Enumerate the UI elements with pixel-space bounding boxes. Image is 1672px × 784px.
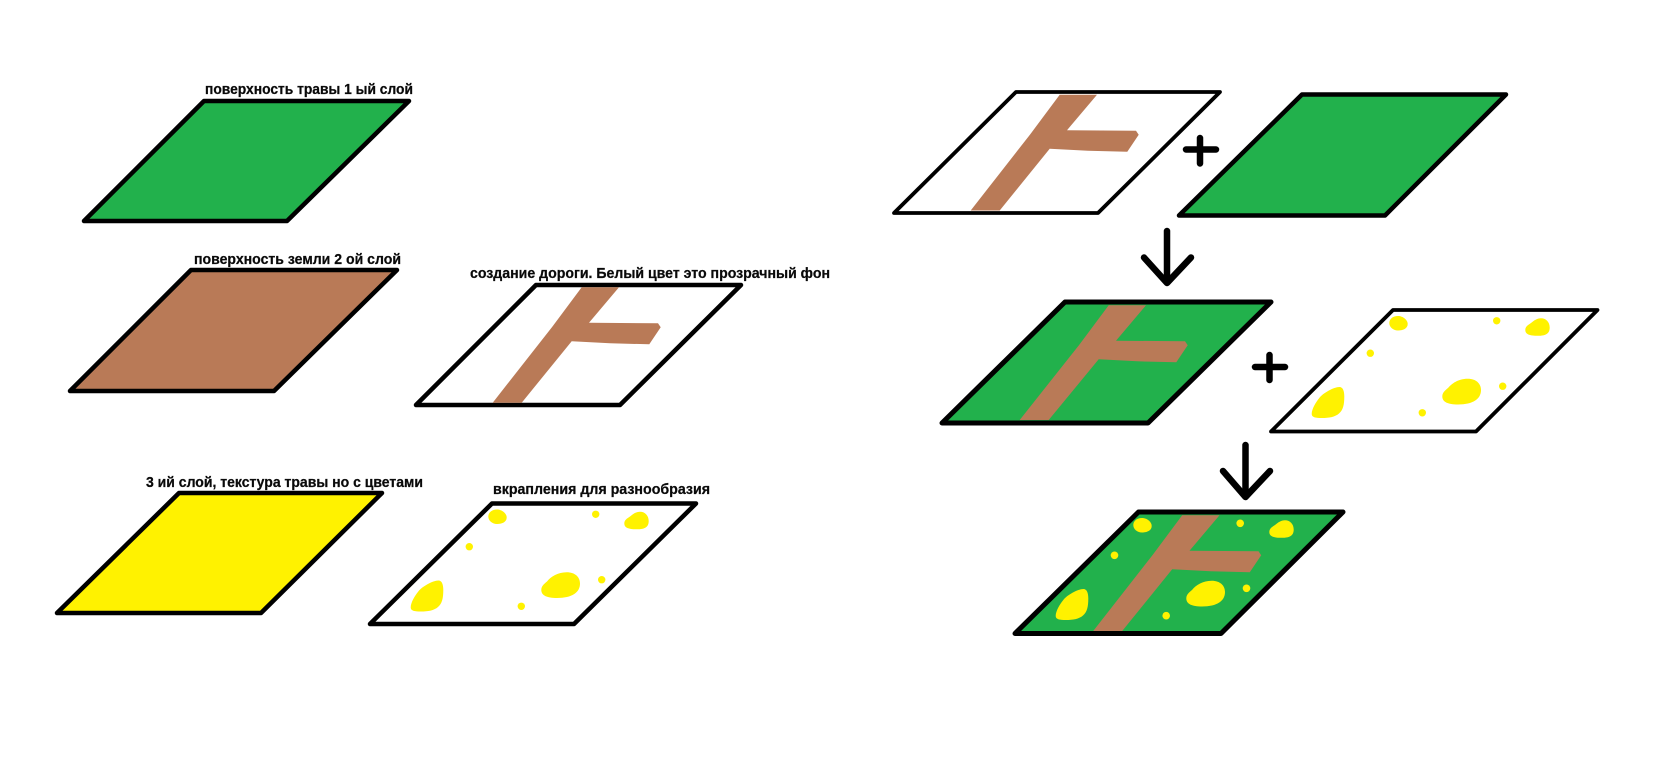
tile: green step 1 — [1179, 94, 1506, 216]
panel: yellow layer 3 — [57, 475, 423, 613]
tile: grass with road composite — [942, 302, 1271, 423]
tile: yellow — [57, 493, 382, 613]
heading: earth layer: поверхность земли 2 ой слой — [194, 252, 401, 268]
icon: plus 2 — [1255, 355, 1285, 380]
heading: road creation: создание дороги. Белый цвет это прозрачный фон — [470, 266, 830, 282]
tile: green — [84, 101, 409, 221]
tile: brown — [70, 270, 397, 391]
panel: earth layer 2 — [70, 252, 401, 391]
icon: plus 1 — [1186, 138, 1216, 164]
panel: grass layer 1 — [84, 82, 413, 221]
tile: road step 1 — [894, 92, 1220, 213]
tile: road on transparent — [416, 285, 741, 405]
heading: yellow layer: 3 ий слой, текстура травы но с цветами — [146, 475, 423, 491]
tile: final composite — [1015, 512, 1343, 634]
panel: road creation — [416, 266, 830, 405]
arrow: down 1 — [1144, 231, 1191, 283]
panel: flower specks — [370, 482, 710, 624]
tile: specks on transparent — [370, 504, 696, 624]
arrow: down 2 — [1223, 445, 1270, 497]
heading: specks: вкрапления для разнообразия — [493, 482, 710, 498]
tile: specks step 2 — [1271, 310, 1598, 432]
heading: grass layer: поверхность травы 1 ый слой — [205, 82, 413, 98]
